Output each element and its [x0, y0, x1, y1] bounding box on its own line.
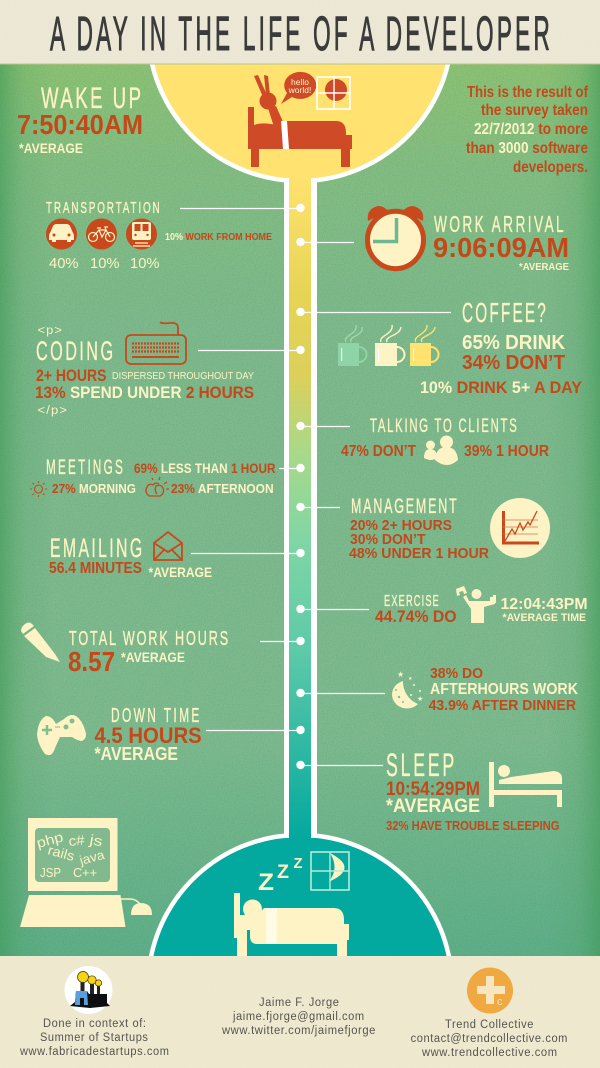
- footer: author: www.twitter.com/jaimefjorge: [221, 1025, 376, 1037]
- icon: game controller: [37, 715, 86, 755]
- footer: trend collective: www.trendcollective.com: [421, 1047, 558, 1059]
- icon: bed with person stretching: [248, 75, 352, 167]
- block: work arrival: 9:06:09AM: [433, 232, 569, 263]
- block: work arrival: *AVERAGE: [519, 261, 569, 273]
- timeline stem: [284, 176, 317, 840]
- icon: zzz: Z: [277, 862, 289, 883]
- block: management: 48% UNDER 1 HOUR: [349, 545, 489, 562]
- languages on screen: php: [35, 828, 65, 851]
- block: meetings: MEETINGS: [46, 456, 125, 479]
- survey note: the survey taken: [481, 102, 588, 119]
- icon: people: [424, 436, 458, 465]
- block: wake up: *AVERAGE: [19, 140, 83, 156]
- block: exercise: EXERCISE: [384, 593, 440, 610]
- block: transportation: 10% WORK FROM HOME: [165, 231, 272, 243]
- block: exercise: 44.74% DO: [375, 607, 456, 626]
- survey note: than 3000 software: [466, 140, 588, 157]
- block: down time: DOWN TIME: [111, 705, 202, 727]
- computer with languages: [20, 818, 152, 927]
- footer band: [0, 956, 600, 1068]
- block: talking to clients: [341, 416, 549, 465]
- block: transportation: 40%: [49, 255, 78, 272]
- block: coffee: 10% DRINK 5+ A DAY: [420, 378, 583, 397]
- footer: summer of startups: Summer of Startups: [40, 1032, 148, 1044]
- block: wake up: 7:50:40AM: [17, 109, 143, 140]
- block: down time: [37, 705, 202, 764]
- icon: sleeping bed: [234, 893, 349, 956]
- logo: trend collective: [467, 968, 513, 1014]
- icon: line chart: [490, 498, 550, 558]
- block: meetings: [30, 456, 276, 497]
- block: coding: 2+ HOURS: [36, 367, 106, 385]
- languages on screen: rails: [46, 842, 76, 864]
- footer: author: jaime.fjorge@gmail.com: [232, 1011, 365, 1023]
- header band: [0, 0, 600, 65]
- top circle: waking up scene: [151, 60, 449, 181]
- block: wake up: WAKE UP: [41, 82, 144, 115]
- block: transportation: 10%: [90, 255, 120, 272]
- icon: zzz: [258, 855, 302, 896]
- block: emailing: *AVERAGE: [148, 564, 212, 580]
- block: down time: 4.5 HOURS: [94, 723, 202, 748]
- block: coffee: [338, 297, 583, 397]
- icon: train: [126, 218, 157, 250]
- footer: trend collective: contact@trendcollective.com: [411, 1033, 568, 1045]
- languages on screen: JSP: [40, 866, 61, 880]
- block: coding: <p>: [38, 325, 63, 337]
- logo: fabrica de startups: [64, 966, 112, 1014]
- icon: keyboard: [126, 322, 186, 364]
- block: total work hours: TOTAL WORK HOURS: [69, 628, 230, 650]
- block: emailing: EMAILING: [50, 533, 144, 563]
- icon: moon and stars: ★: [397, 670, 404, 679]
- icon: moon and stars: [392, 670, 423, 708]
- survey note: [466, 84, 589, 176]
- block: talking to clients: 39% 1 HOUR: [464, 443, 549, 460]
- block: coding: DISPERSED THROUGHOUT DAY: [112, 370, 254, 382]
- icon: car: [46, 218, 77, 250]
- icon: bed with sleeper: [489, 762, 562, 807]
- block: total work hours: 8.57: [68, 646, 115, 677]
- block: coding: CODING: [36, 336, 116, 366]
- block: total work hours: *AVERAGE: [121, 649, 185, 665]
- footer: summer of startups: [19, 966, 170, 1058]
- block: wake up: [17, 82, 144, 156]
- block: coffee: 34% DON’T: [462, 352, 565, 374]
- block: coding: 13% SPEND UNDER 2 HOURS: [35, 383, 254, 402]
- icon: moon and stars: ★: [417, 695, 423, 703]
- icon: zzz: Z: [294, 855, 302, 872]
- block: sleep: SLEEP: [386, 747, 457, 783]
- survey note: 22/7/2012 to more: [474, 121, 588, 138]
- block: emailing: 56.4 MINUTES: [49, 560, 142, 577]
- icon: coffee cups: [338, 325, 439, 366]
- icon: bike: [86, 218, 117, 250]
- block: meetings: 23% AFTERNOON: [171, 481, 274, 496]
- icon: window with moon: [311, 852, 349, 890]
- block: afterhours work: 43.9% AFTER DINNER: [429, 697, 576, 714]
- block: exercise: [375, 586, 588, 626]
- icon: moon and stars: ★: [408, 676, 413, 682]
- block: transportation: [46, 200, 272, 272]
- languages on screen: C++: [73, 866, 97, 880]
- block: coffee: 65% DRINK: [462, 332, 566, 354]
- icon: pencil: [21, 622, 60, 662]
- block: exercise: 12:04:43PM: [500, 596, 588, 613]
- block: meetings: 69% LESS THAN 1 HOUR: [134, 460, 276, 476]
- block: afterhours work: AFTERHOURS WORK: [430, 681, 578, 698]
- footer: summer of startups: www.fabricadestartups.com: [19, 1046, 170, 1058]
- block: management: [349, 495, 550, 562]
- icon: sun: [30, 481, 47, 497]
- survey note: developers.: [513, 159, 588, 176]
- block: talking to clients: 47% DON’T: [341, 443, 416, 460]
- icon: envelope: [154, 532, 182, 560]
- timeline connector lines and dots: [180, 204, 451, 769]
- block: sleep: 32% HAVE TROUBLE SLEEPING: [386, 818, 560, 833]
- icon: man lifting dumbbells: [456, 586, 496, 623]
- block: sleep: *AVERAGE: [386, 796, 480, 817]
- block: meetings: 27% MORNING: [52, 481, 136, 496]
- block: management: 20% 2+ HOURS: [350, 517, 452, 534]
- languages on screen: c#: [68, 832, 85, 849]
- footer: summer of startups: Done in context of:: [43, 1018, 147, 1030]
- block: emailing: [49, 532, 212, 580]
- block: sleep: 10:54:29PM: [386, 779, 480, 800]
- footer: trend collective: Trend Collective: [445, 1019, 534, 1031]
- bottom circle: sleeping scene: [150, 835, 450, 960]
- block: afterhours work: 38% DO: [430, 666, 483, 682]
- block: management: 30% DON’T: [350, 531, 426, 548]
- block: coding: </p>: [38, 405, 68, 417]
- speech bubble: hello world: hello: [291, 77, 309, 87]
- footer: trend collective: [411, 968, 568, 1059]
- logo: trend collective: c: [497, 996, 503, 1008]
- block: down time: *AVERAGE: [94, 744, 178, 764]
- footer: author: [221, 997, 376, 1037]
- icon: cloud and sun: [146, 477, 169, 496]
- icon: zzz: Z: [258, 869, 274, 896]
- languages on screen: [35, 828, 107, 880]
- block: transportation: TRANSPORTATION: [46, 200, 162, 217]
- block: afterhours work: [392, 666, 578, 714]
- block: total work hours: [21, 622, 230, 677]
- icon: window with sun: [317, 77, 350, 109]
- block: management: MANAGEMENT: [351, 495, 458, 518]
- languages on screen: java: [77, 847, 107, 868]
- block: exercise: *AVERAGE TIME: [502, 612, 586, 624]
- block: transportation: 10%: [130, 255, 160, 272]
- block: work arrival: [368, 206, 569, 273]
- block: sleep: [386, 747, 562, 833]
- speech bubble: hello world: [281, 72, 316, 104]
- block: coding: [35, 322, 254, 417]
- icon: alarm clock: [368, 206, 424, 269]
- speech bubble: hello world: world!: [288, 85, 311, 95]
- languages on screen: js: [87, 831, 104, 849]
- footer: author: Jaime F. Jorge: [259, 997, 340, 1009]
